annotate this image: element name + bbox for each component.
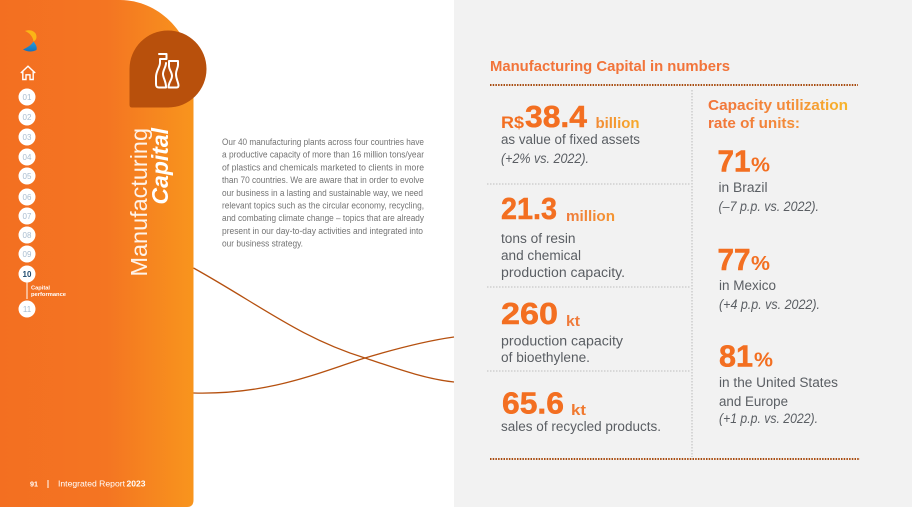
chapter navigation: 01 — [23, 93, 32, 102]
stat: production capacity — [501, 191, 625, 280]
chapter navigation: 05 — [23, 172, 32, 181]
intro paragraph: and combating climate change – topics that are already — [222, 213, 425, 223]
chapter navigation — [18, 88, 66, 318]
stat: recycled products sales: 65.6 — [502, 386, 564, 420]
intro paragraph: relevant topics such as the circular economy, recycling, — [222, 200, 424, 210]
stat: fixed assets value — [501, 99, 640, 166]
stat: recycled products sales: kt — [571, 403, 586, 419]
stat: Mexico utilization: % — [751, 253, 770, 275]
icon badge: bottles — [130, 30, 206, 108]
stat: United States and Europe utilization: 81 — [719, 338, 753, 374]
stat: recycled products sales — [501, 386, 661, 434]
stat: fixed assets value: as value of fixed assets — [501, 132, 640, 147]
curved decorative lines — [194, 268, 454, 393]
capacity utilization heading: Capacity utilization — [708, 97, 848, 114]
footer: page number and report name — [30, 478, 146, 488]
stat: Brazil utilization — [718, 144, 819, 214]
stat: Brazil utilization: % — [751, 154, 770, 176]
stat: production capacity: 21.3 — [501, 191, 557, 226]
stat: fixed assets value: R$ — [501, 113, 525, 132]
stat: United States and Europe utilization — [719, 338, 838, 426]
stat: Mexico utilization: in Mexico — [719, 278, 776, 293]
right grey panel background — [454, 0, 912, 507]
intro paragraph: a productive capacity of more than 16 million tons/year — [222, 150, 424, 160]
chapter navigation: 02 — [23, 113, 32, 122]
orange navigation panel — [0, 0, 194, 507]
intro paragraph: our business in a lasting and sustainable way, we need — [222, 188, 423, 198]
stat: production capacity: and chemical — [501, 248, 581, 263]
intro paragraph: of plastics and chemicals marketed to clients in more — [222, 162, 424, 172]
stat: bioethylene capacity: 260 — [501, 296, 558, 331]
chapter navigation: performance — [31, 292, 66, 298]
intro paragraph: present in our day-to-day activities and integrated into — [222, 226, 423, 236]
dotted dividers — [487, 85, 860, 459]
chapter navigation: 04 — [23, 153, 32, 162]
stat: recycled products sales: sales of recycled products. — [501, 419, 661, 434]
stat: Mexico utilization: (+4 p.p. vs. 2022). — [719, 297, 820, 312]
chapter navigation: Capital — [31, 286, 50, 292]
numbers heading: Manufacturing Capital in numbers — [490, 58, 730, 75]
section title: Manufacturing Capital: Manufacturing — [126, 128, 152, 276]
intro paragraph — [222, 137, 425, 249]
chapter navigation: 06 — [23, 193, 32, 202]
stat: United States and Europe utilization: % — [754, 350, 773, 372]
stat: Mexico utilization — [718, 242, 820, 312]
capacity utilization heading: rate of units: — [708, 115, 800, 132]
stat: bioethylene capacity: of bioethylene. — [501, 350, 590, 365]
icon: company logo — [23, 30, 37, 51]
section title: Manufacturing Capital — [126, 128, 173, 276]
footer: page number and report name: Integrated Report — [58, 478, 126, 488]
stat: United States and Europe utilization: in the United States — [719, 375, 838, 390]
stat: Brazil utilization: (–7 p.p. vs. 2022). — [718, 199, 819, 214]
stat: production capacity: production capacity. — [501, 265, 625, 280]
footer: page number and report name: 91 — [30, 480, 38, 488]
stat: fixed assets value: (+2% vs. 2022). — [501, 151, 589, 166]
stat: United States and Europe utilization: and Europe — [719, 394, 788, 409]
stat: production capacity: tons of resin — [501, 231, 576, 246]
stat: bioethylene capacity: kt — [566, 314, 580, 330]
stat: Brazil utilization: 71 — [718, 144, 750, 178]
intro paragraph: Our 40 manufacturing plants across four countries have — [222, 137, 424, 147]
chapter navigation: 11 — [23, 305, 32, 314]
stat: Mexico utilization: 77 — [718, 242, 750, 277]
icon: home — [21, 66, 35, 80]
stat: fixed assets value: 38.4 — [525, 99, 588, 134]
stat: fixed assets value: billion — [596, 116, 640, 132]
chapter navigation: 03 — [23, 133, 32, 142]
capacity utilization heading — [708, 97, 848, 132]
chapter navigation: 09 — [23, 250, 32, 259]
chapter navigation: 07 — [23, 212, 32, 221]
stat: Brazil utilization: in Brazil — [718, 180, 768, 195]
chapter navigation: 08 — [23, 231, 32, 240]
footer: page number and report name: 2023 — [126, 478, 146, 488]
stat: bioethylene capacity: production capacity — [501, 334, 623, 348]
stat: bioethylene capacity — [501, 296, 623, 365]
intro paragraph: our business strategy. — [222, 239, 303, 249]
section title: Manufacturing Capital: Capital — [147, 128, 173, 204]
stat: production capacity: million — [566, 209, 615, 225]
chapter navigation: 10 — [23, 270, 32, 279]
intro paragraph: than 70 countries. We are aware that in order to evolve — [222, 175, 424, 185]
stat: United States and Europe utilization: (+1 p.p. vs. 2022). — [719, 411, 818, 426]
